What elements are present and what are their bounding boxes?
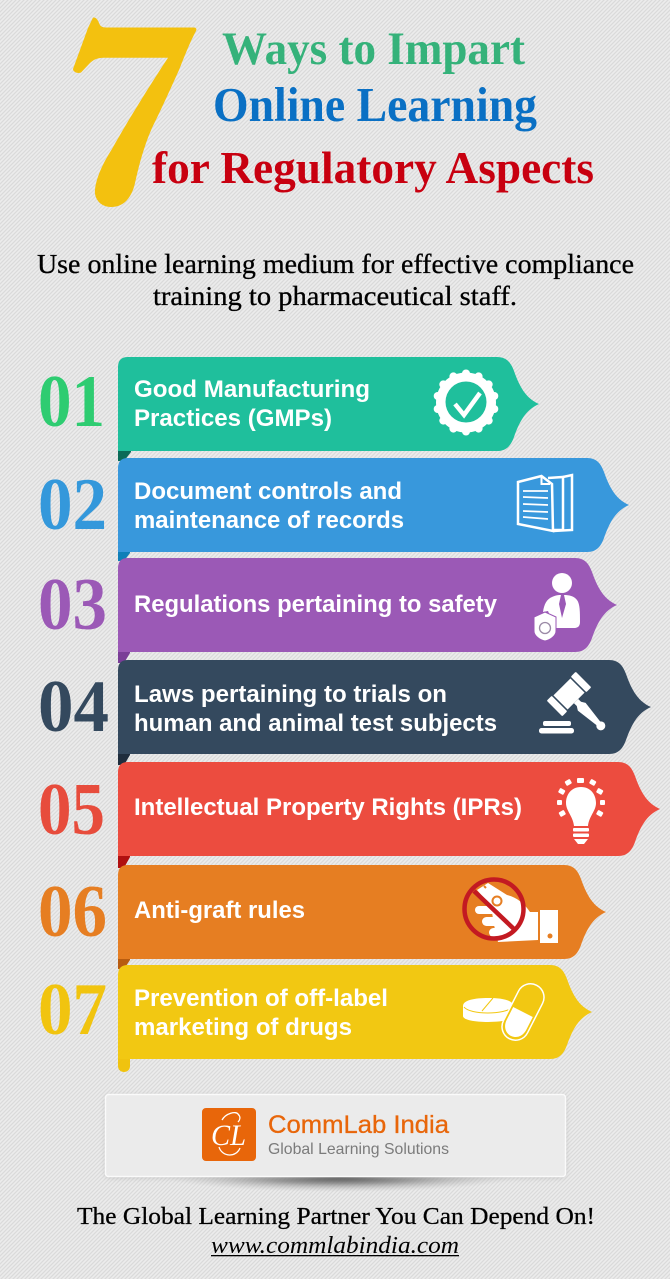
ribbon tail 01 bbox=[118, 445, 131, 461]
label 04 bbox=[134, 681, 497, 737]
label 01: Good Manufacturing bbox=[134, 376, 370, 403]
item 06 bbox=[38, 865, 606, 969]
icon: person with shield bbox=[534, 573, 580, 641]
footer slogan: The Global Learning Partner You Can Depend On! bbox=[77, 1204, 595, 1230]
icon: tablet and capsule bbox=[463, 979, 549, 1045]
item 02 bbox=[38, 458, 629, 561]
label 07: marketing of drugs bbox=[134, 1014, 352, 1041]
subtitle bbox=[37, 249, 634, 311]
ribbon tail 07 bbox=[118, 1053, 130, 1072]
number 06: 06 bbox=[38, 871, 107, 953]
label 01: Practices (GMPs) bbox=[134, 405, 332, 432]
label 01 bbox=[134, 376, 370, 432]
label 03: Regulations pertaining to safety bbox=[134, 591, 498, 618]
number 02: 02 bbox=[38, 464, 107, 546]
item 03 bbox=[38, 558, 617, 663]
label 04: human and animal test subjects bbox=[134, 710, 497, 737]
label 02: maintenance of records bbox=[134, 507, 404, 534]
number 07: 07 bbox=[38, 969, 107, 1051]
item 01 bbox=[38, 357, 539, 461]
tagline: Global Learning Solutions bbox=[268, 1141, 449, 1158]
brand name: CommLab India bbox=[268, 1111, 449, 1139]
number 04: 04 bbox=[38, 666, 109, 748]
ribbon tail 05 bbox=[118, 850, 130, 868]
logo mark bbox=[202, 1108, 256, 1161]
label 02: Document controls and bbox=[134, 478, 402, 505]
ribbon 06 bbox=[118, 865, 606, 959]
ribbon tail 03 bbox=[118, 646, 130, 663]
ribbon 04 bbox=[118, 660, 651, 754]
number 01: 01 bbox=[38, 361, 105, 443]
ribbon tail 06 bbox=[118, 953, 130, 969]
icon: certified badge bbox=[434, 370, 498, 436]
big numeral 7 bbox=[73, 17, 196, 207]
item 07 bbox=[38, 965, 592, 1072]
icon: documents bbox=[518, 475, 572, 531]
ribbon 05 bbox=[118, 762, 660, 856]
subtitle: Use online learning medium for effective compliance bbox=[37, 249, 634, 279]
number 05: 05 bbox=[38, 769, 105, 851]
ribbon 02 bbox=[118, 458, 629, 552]
ribbon 07 bbox=[118, 965, 592, 1059]
label 02 bbox=[134, 478, 404, 534]
label 07: Prevention of off-label bbox=[134, 985, 388, 1012]
icon: light bulb bbox=[557, 778, 605, 844]
footer url: www.commlabindia.com bbox=[211, 1233, 459, 1259]
logo mark: CL bbox=[211, 1119, 246, 1152]
subtitle: training to pharmaceutical staff. bbox=[153, 281, 517, 311]
ribbon 03 bbox=[118, 558, 617, 652]
title line 3: for Regulatory Aspects bbox=[152, 142, 594, 193]
label 04: Laws pertaining to trials on bbox=[134, 681, 447, 708]
card shadow bbox=[165, 1162, 515, 1192]
label 06: Anti-graft rules bbox=[134, 897, 305, 924]
title line 1: Ways to Impart bbox=[222, 23, 525, 75]
icon: gavel bbox=[539, 672, 618, 743]
ribbon 01 bbox=[118, 357, 539, 451]
ribbon tail 02 bbox=[118, 546, 130, 561]
ribbon tail 04 bbox=[118, 748, 130, 765]
icon: no bribery hand bbox=[464, 880, 558, 943]
number 03: 03 bbox=[38, 564, 107, 646]
card panel bbox=[106, 1094, 566, 1176]
label 05: Intellectual Property Rights (IPRs) bbox=[134, 794, 522, 821]
logo card bbox=[106, 1094, 566, 1192]
item 05 bbox=[38, 762, 660, 868]
item 04 bbox=[38, 660, 651, 765]
label 07 bbox=[134, 985, 388, 1041]
title line 2: Online Learning bbox=[213, 77, 537, 132]
title bbox=[73, 17, 594, 207]
